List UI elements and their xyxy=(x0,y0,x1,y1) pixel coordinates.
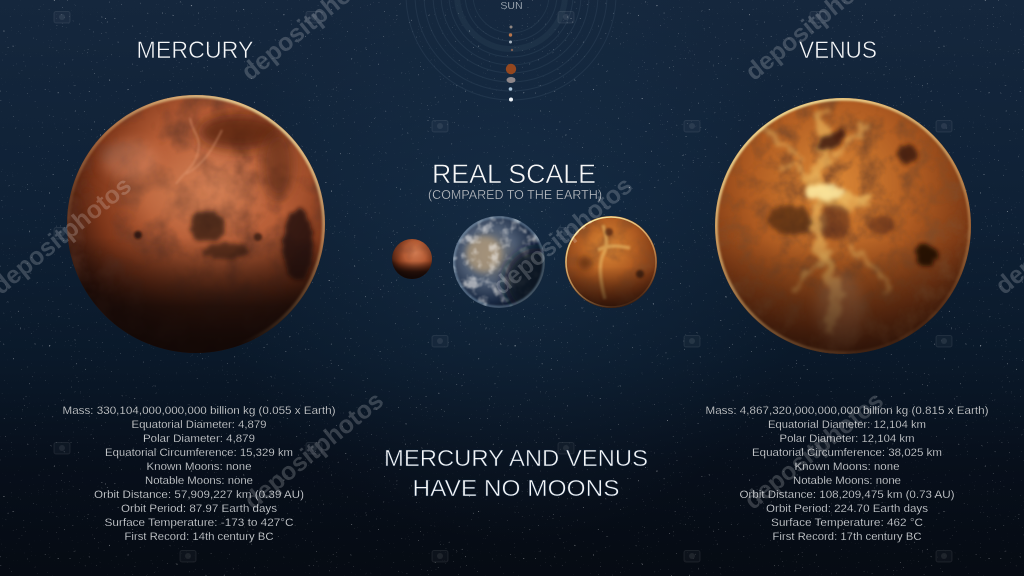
facts: Mercury: Orbit Distance: 57,909,227 km (0.39 AU) xyxy=(94,489,304,501)
facts: Venus: Equatorial Circumference: 38,025 km xyxy=(752,447,942,459)
facts: Mercury xyxy=(62,405,336,543)
facts: Mercury: Notable Moons: none xyxy=(145,475,253,487)
facts: Venus: Equatorial Diameter: 12,104 km xyxy=(768,419,926,431)
facts: Mercury: Surface Temperature: -173 to 427°C xyxy=(104,517,294,529)
heading: real scale: (COMPARED TO THE EARTH) xyxy=(428,187,602,202)
title: Mercury: MERCURY xyxy=(136,37,254,64)
statement: no moons: MERCURY AND VENUS xyxy=(384,445,648,471)
facts: Venus: First Record: 17th century BC xyxy=(772,531,922,543)
planet: Venus small xyxy=(565,216,657,308)
facts: Mercury: First Record: 14th century BC xyxy=(124,531,274,543)
facts: Mercury: Equatorial Circumference: 15,329 km xyxy=(105,447,293,459)
planet: Venus large xyxy=(715,98,971,354)
facts: Mercury: Equatorial Diameter: 4,879 xyxy=(132,419,266,431)
planet: Mercury large xyxy=(67,95,325,353)
heading: real scale: REAL SCALE xyxy=(432,159,596,189)
facts: Venus xyxy=(706,405,989,543)
facts: Mercury: Polar Diameter: 4,879 xyxy=(143,433,255,445)
facts: Venus: Orbit Distance: 108,209,475 km (0.73 AU) xyxy=(740,489,955,501)
facts: Venus: Mass: 4,867,320,000,000,000 billion kg (0.815 x Earth) xyxy=(706,405,989,417)
watermarks: depositphotos: depositphotos xyxy=(488,171,638,300)
planet: Mercury small xyxy=(392,239,432,279)
label: sun: SUN xyxy=(500,0,523,12)
heading: real scale xyxy=(428,159,602,202)
planet: Earth small xyxy=(453,216,545,308)
facts: Mercury: Mass: 330,104,000,000,000 billion kg (0.055 x Earth) xyxy=(62,405,336,417)
facts: Venus: Surface Temperature: 462 °C xyxy=(771,517,923,529)
facts: Venus: Orbit Period: 224.70 Earth days xyxy=(766,503,928,515)
statement: no moons: HAVE NO MOONS xyxy=(412,475,620,501)
facts: Venus: Known Moons: none xyxy=(794,461,900,473)
facts: Mercury: Orbit Period: 87.97 Earth days xyxy=(121,503,277,515)
facts: Mercury: Known Moons: none xyxy=(146,461,252,473)
facts: Venus: Polar Diameter: 12,104 km xyxy=(780,433,914,445)
solar system diagram xyxy=(406,0,616,102)
watermarks: depositphotos: depositphotos xyxy=(239,386,389,515)
watermarks: depositphotos: depositphotos xyxy=(739,386,889,515)
facts: Venus: Notable Moons: none xyxy=(793,475,901,487)
title: Venus: VENUS xyxy=(799,37,877,64)
statement: no moons xyxy=(384,445,648,501)
